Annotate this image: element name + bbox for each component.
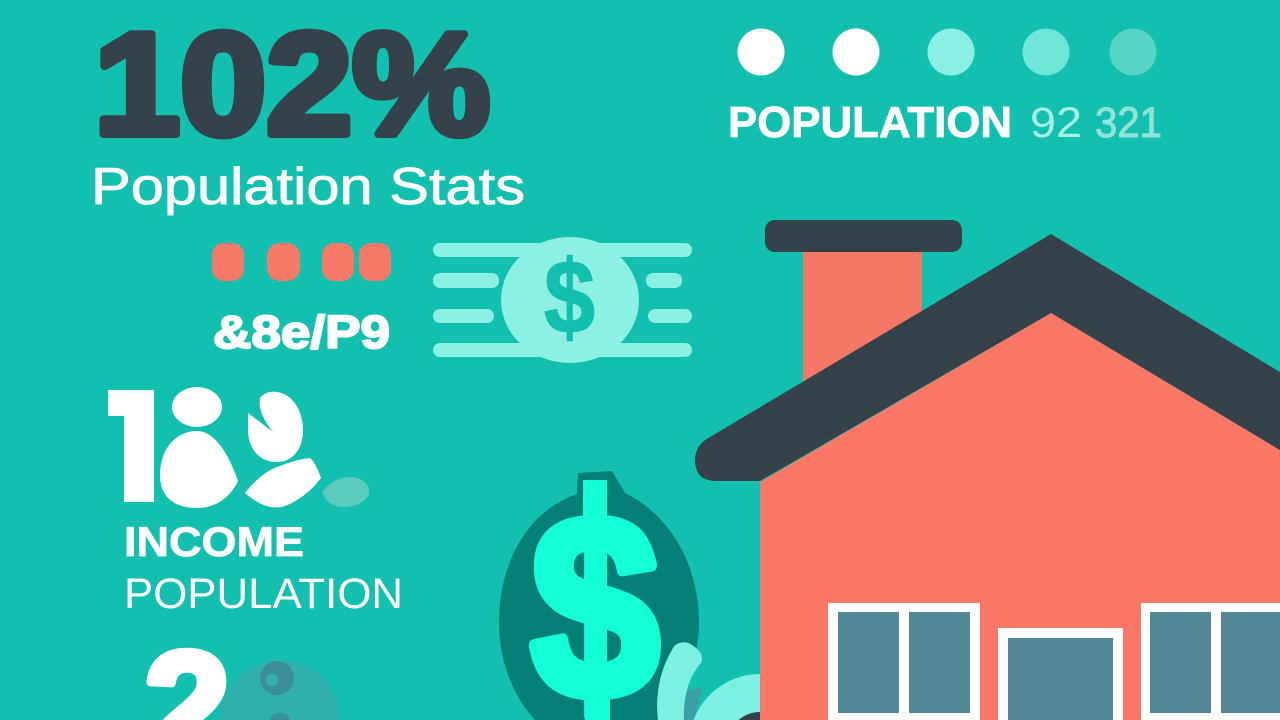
icon: people with number one [108, 387, 369, 508]
door [998, 628, 1123, 720]
label: income: INCOME [124, 518, 304, 565]
pale circle behind number [220, 660, 340, 720]
label: population top right [728, 98, 1162, 147]
right window [1141, 603, 1280, 720]
icon: curved coin arcs [657, 642, 760, 720]
left window [828, 603, 980, 720]
chimney cap [765, 220, 962, 252]
dot row [738, 28, 1156, 76]
subheading: Population Stats: Population Stats [91, 158, 525, 216]
label: population top right: 92 [1030, 99, 1082, 147]
label: population: POPULATION [124, 570, 403, 618]
illustration: house [695, 220, 1280, 720]
icon: dollar banknote: $ [544, 240, 595, 356]
label: population top right: POPULATION [728, 98, 1012, 147]
heading: 102%: 102% [94, 3, 490, 165]
icon: dollar banknote [433, 237, 692, 363]
house body [760, 313, 1280, 720]
garbled small label: &8e/P9 [213, 306, 390, 358]
chimney [803, 245, 922, 385]
label: population top right: 321 [1095, 99, 1162, 147]
roof [695, 234, 1280, 481]
coral squares [212, 243, 391, 281]
